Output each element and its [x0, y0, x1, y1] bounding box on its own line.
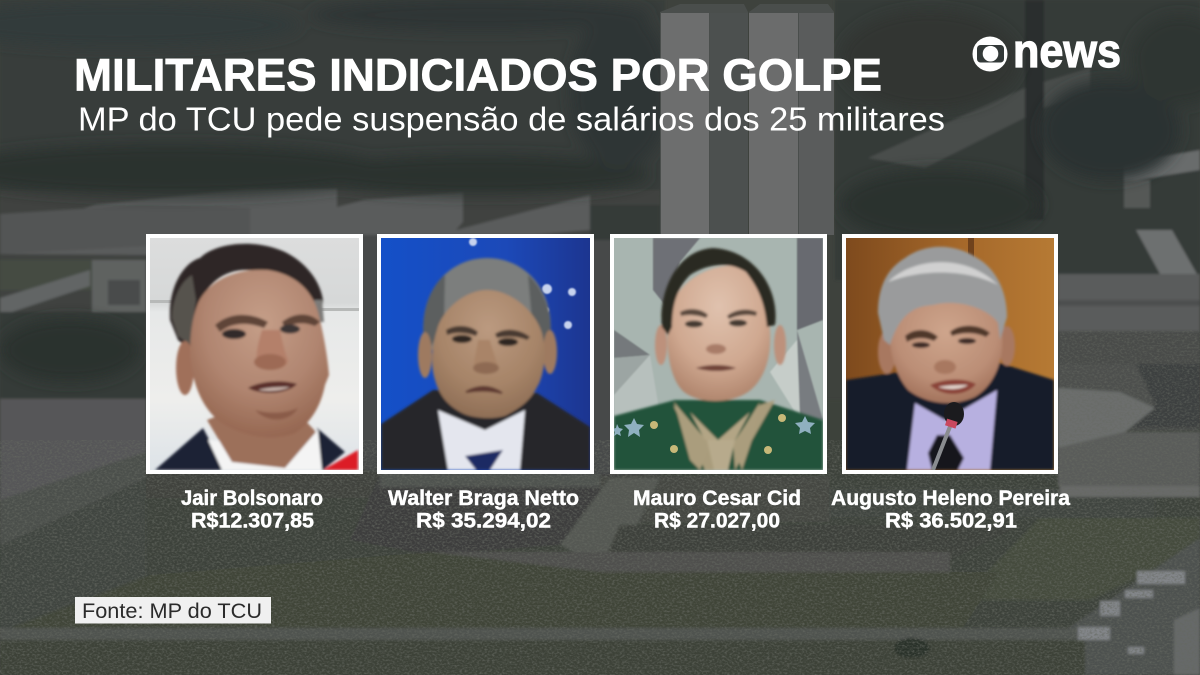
caption: Walter Braga Netto: R$ 35.294,02	[416, 510, 551, 532]
subtitle: MP do TCU pede suspensão de salários dos 25 militares	[78, 100, 945, 138]
title: MILITARES INDICIADOS POR GOLPE	[74, 50, 882, 100]
portrait card: Jair Bolsonaro	[146, 234, 363, 474]
caption: Augusto Heleno Pereira	[831, 487, 1070, 532]
caption: Mauro Cesar Cid	[633, 487, 801, 532]
portrait card: Mauro Cesar Cid	[610, 234, 827, 474]
background: crowd texture	[0, 330, 1200, 675]
caption: Mauro Cesar Cid: R$ 27.027,00	[654, 510, 780, 532]
caption: Augusto Heleno Pereira: Augusto Heleno Pereira	[831, 487, 1070, 510]
logo wordmark: news	[1013, 24, 1121, 77]
photo: Augusto Heleno Pereira	[846, 238, 1054, 470]
caption: Walter Braga Netto: Walter Braga Netto	[388, 487, 579, 510]
caption: Mauro Cesar Cid: Mauro Cesar Cid	[633, 487, 801, 510]
background: twin towers	[660, 4, 834, 235]
portrait card: Walter Braga Netto	[377, 234, 594, 474]
portrait card: Augusto Heleno Pereira	[842, 234, 1058, 474]
icon: globe mark	[972, 36, 1008, 72]
photo: Walter Braga Netto	[381, 238, 590, 470]
logo: GloboNews	[972, 24, 1121, 77]
source label: Fonte: MP do TCU	[82, 599, 262, 623]
caption: Walter Braga Netto	[388, 487, 579, 532]
caption: Jair Bolsonaro: Jair Bolsonaro	[181, 487, 323, 510]
caption: Jair Bolsonaro: R$12.307,85	[191, 510, 314, 532]
caption: Augusto Heleno Pereira: R$ 36.502,91	[885, 510, 1017, 532]
photo: Jair Bolsonaro	[150, 238, 360, 470]
photo: Mauro Cesar Cid	[612, 238, 823, 470]
caption: Jair Bolsonaro	[181, 487, 323, 532]
